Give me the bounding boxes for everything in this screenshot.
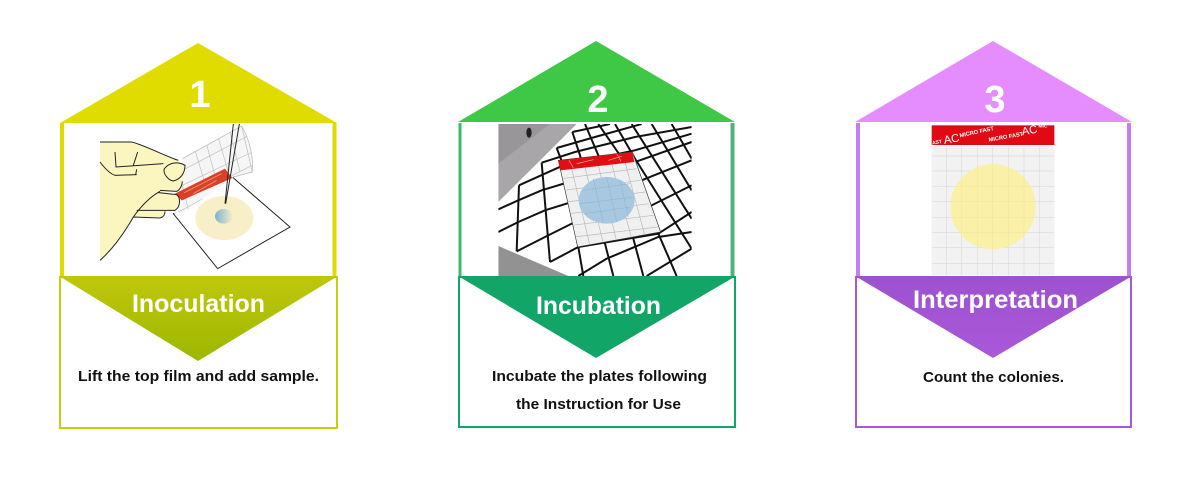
red band label text: AC [1021,124,1038,138]
heading: Incubation: Incubation [536,292,661,320]
panel: step 1 inoculation [59,43,338,428]
roof: step 1 [60,43,337,123]
red band label text [932,125,1048,145]
illustration: lifting film and adding sample [100,124,290,269]
banner triangle: step 1 [59,276,338,361]
heading: Interpretation: Interpretation [913,286,1078,314]
house walls: step 3 [858,123,1129,276]
lower text box: step 3 [856,277,1131,427]
illustration: plate with grid and colonies area [932,123,1054,275]
red band label text: MIC [1038,123,1048,129]
caption: step 3: Count the colonies. [923,369,1064,386]
caption: step 2: Incubate the plates following [492,368,707,385]
lower text box: step 1 [60,277,337,428]
banner triangle: step 3 [855,276,1132,358]
heading: Inoculation: Inoculation [132,290,265,318]
number 2: 2 [587,79,609,121]
caption: step 1: Lift the top film and add sample. [78,368,319,385]
panel: step 2 incubation [458,41,736,427]
number 1: 1 [189,74,211,116]
red band label text: MICRO FAST [959,126,995,139]
roof: step 2 [458,41,735,122]
number 3: 3 [984,79,1006,121]
illustration: plate in incubator rack [498,124,692,276]
caption: step 2 second line: the Instruction for Use [516,396,681,413]
lower text box: step 2 [459,277,735,427]
red band label text: MICRO FAST [988,132,1024,144]
roof: step 3 [855,41,1132,122]
house walls: step 2 [458,123,462,276]
panel: step 3 interpretation [855,41,1132,427]
red band label text: AST [932,139,943,147]
red band label text: AC [943,132,960,147]
banner triangle: step 2 [458,276,736,358]
house walls: step 1 [62,123,334,276]
